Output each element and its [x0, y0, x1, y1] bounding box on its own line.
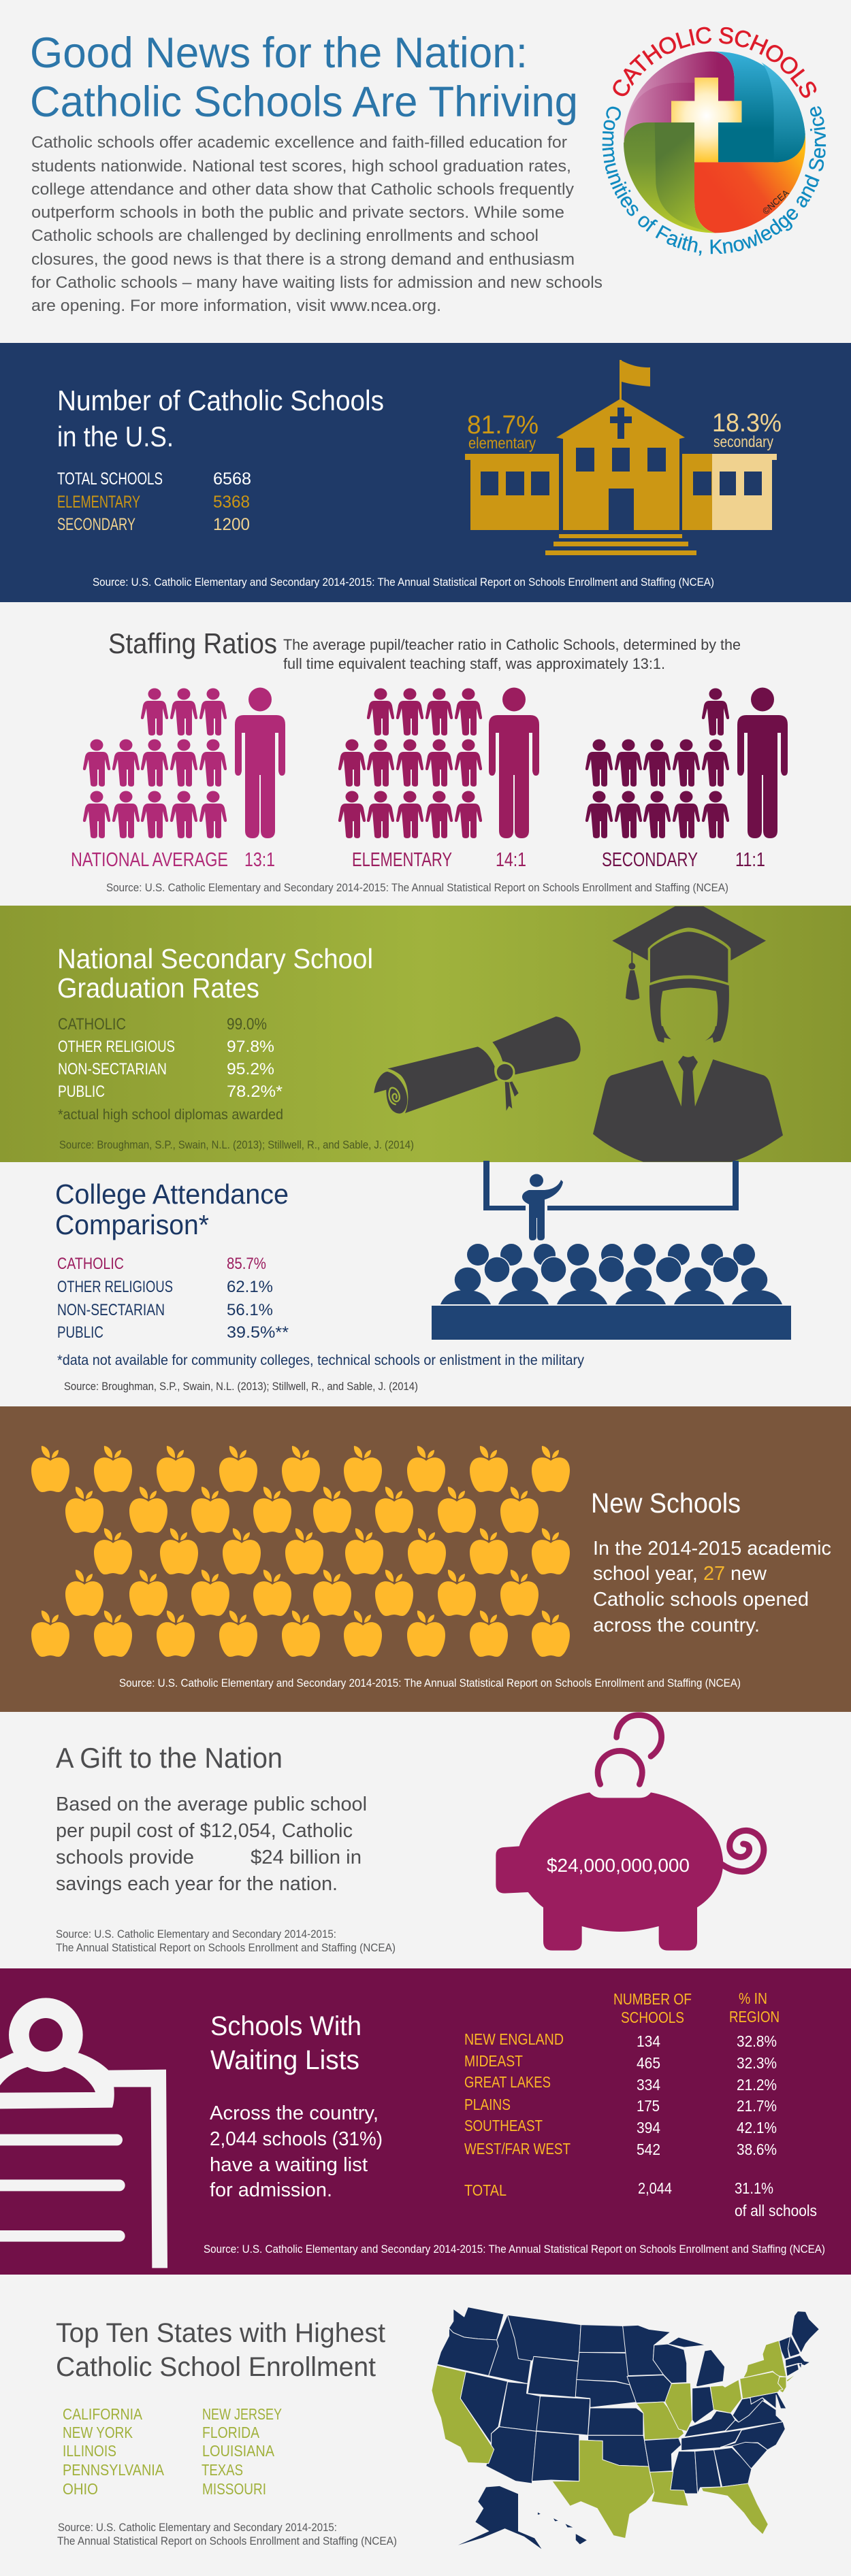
ratio labels: 13:1 — [244, 849, 275, 871]
college data: NON-SECTARIAN — [57, 1301, 165, 1319]
description: Catholic schools opened — [593, 1589, 809, 1611]
description: Based on the average public school — [56, 1794, 367, 1815]
graduation data: PUBLIC — [58, 1083, 105, 1101]
heading — [210, 2011, 362, 2075]
heading: Schools With — [210, 2011, 362, 2041]
description — [56, 1794, 367, 1895]
region percentages: 21.7% — [737, 2097, 777, 2115]
icon: school building — [465, 360, 777, 555]
description — [283, 636, 741, 672]
panel: staffing ratios — [71, 627, 788, 894]
pictogram: national average — [83, 687, 285, 838]
icon: Catholic Schools logo: ©NCEA — [760, 188, 791, 216]
college data: CATHOLIC — [57, 1255, 124, 1273]
intro text block: are opening. For more information, visit www.ncea.org. — [31, 297, 441, 315]
intro text block: closures, the good news is that there is a strong demand and enthusiasm — [31, 250, 575, 269]
region names: GREAT LAKES — [464, 2073, 551, 2091]
heading: A Gift to the Nation — [56, 1742, 283, 1774]
school numbers: 394 — [637, 2119, 660, 2136]
region names: PLAINS — [464, 2096, 511, 2113]
heading: College Attendance — [55, 1178, 289, 1210]
school counts — [57, 469, 251, 534]
description: per pupil cost of $12,054, Catholic — [56, 1820, 353, 1842]
region percentages: 38.6% — [737, 2141, 777, 2158]
state list: ILLINOIS — [63, 2442, 116, 2460]
heading: Catholic School Enrollment — [56, 2352, 376, 2382]
heading — [56, 2318, 385, 2382]
state list: CALIFORNIA — [63, 2405, 143, 2423]
graduation data: 78.2%* — [227, 1083, 283, 1101]
heading: Waiting Lists — [210, 2045, 359, 2075]
state list: OHIO — [63, 2480, 98, 2498]
table header — [613, 1989, 780, 2026]
description: across the country. — [593, 1615, 760, 1636]
region percentages: 32.8% — [737, 2032, 777, 2050]
front row — [454, 1267, 768, 1293]
intro text block: Catholic schools offer academic excellence and faith-filled education for — [31, 133, 567, 152]
school percentages: 81.7% — [467, 411, 539, 440]
middle row — [484, 1257, 739, 1283]
ratio labels: ELEMENTARY — [352, 849, 452, 871]
ratio labels: 14:1 — [496, 849, 526, 871]
table header: SCHOOLS — [621, 2009, 684, 2026]
icon: Catholic Schools logo: Communities of Faith, Knowledge and Service — [602, 106, 826, 256]
description: $24 billion in — [251, 1847, 362, 1868]
school numbers: 134 — [637, 2032, 660, 2050]
heading — [55, 1178, 289, 1240]
icon: Catholic Schools logo: CATHOLIC SCHOOLS — [613, 27, 817, 98]
state list: LOUISIANA — [202, 2442, 275, 2460]
title: Good News for the Nation: — [30, 29, 528, 77]
source note: Source: Broughman, S.P., Swain, N.L. (2013); Stillwell, R., and Sable, J. (2014) — [64, 1380, 418, 1393]
heading — [57, 384, 384, 452]
school counts: 5368 — [213, 493, 250, 512]
icon: graduate — [593, 906, 783, 1162]
source note — [56, 1928, 396, 1954]
school numbers: 334 — [637, 2076, 660, 2094]
region names: MIDEAST — [464, 2052, 523, 2070]
heading: Graduation Rates — [57, 972, 259, 1004]
table header: REGION — [729, 2008, 780, 2026]
state list: NEW JERSEY — [202, 2405, 282, 2423]
source note: Source: U.S. Catholic Elementary and Secondary 2014-2015: — [56, 1928, 336, 1941]
intro text block: college attendance and other data show that Catholic schools frequently — [31, 180, 574, 199]
icon: piggy bank — [496, 1715, 764, 1951]
region percentages: of all schools — [735, 2202, 817, 2219]
description: In the 2014-2015 academic — [593, 1538, 831, 1559]
footnote: *actual high school diplomas awarded — [58, 1107, 283, 1123]
graduation data: OTHER RELIGIOUS — [58, 1038, 175, 1056]
graduation data: CATHOLIC — [58, 1015, 126, 1034]
apples pictogram — [31, 1446, 570, 1657]
panel: a gift to the nation — [56, 1715, 764, 1954]
heading: Comparison* — [55, 1209, 209, 1240]
school percentages: elementary — [468, 434, 536, 452]
region percentages: 31.1% — [735, 2179, 773, 2197]
college data: 39.5%** — [227, 1323, 289, 1342]
heading: Staffing Ratios — [108, 627, 277, 659]
region percentages: 42.1% — [737, 2119, 777, 2136]
school percentages: secondary — [713, 433, 773, 450]
school numbers — [637, 2032, 672, 2197]
heading — [57, 943, 373, 1004]
state list — [63, 2405, 282, 2498]
region names: WEST/FAR WEST — [464, 2140, 571, 2158]
school percentages — [467, 409, 782, 452]
panel: number of Catholic schools — [0, 343, 851, 602]
description: Across the country, — [210, 2102, 379, 2124]
description: The average pupil/teacher ratio in Catholic Schools, determined by the — [283, 636, 741, 653]
description: schools provide — [56, 1847, 194, 1868]
source note: The Annual Statistical Report on Schools Enrollment and Staffing (NCEA) — [57, 2535, 397, 2547]
source note: Source: Broughman, S.P., Swain, N.L. (2013); Stillwell, R., and Sable, J. (2014) — [59, 1138, 414, 1151]
description: savings each year for the nation. — [56, 1873, 338, 1895]
title — [30, 29, 578, 126]
intro text block: outperform schools in both the public and private sectors. While some — [31, 203, 564, 222]
region names: SOUTHEAST — [464, 2117, 543, 2134]
school numbers: 2,044 — [638, 2179, 672, 2197]
state list: MISSOURI — [202, 2480, 266, 2498]
description: 2,044 schools (31%) — [210, 2128, 383, 2150]
intro text block — [31, 133, 603, 315]
ratio labels: 11:1 — [735, 849, 765, 871]
table header: NUMBER OF — [613, 1990, 692, 2008]
panel: top ten states — [56, 2307, 819, 2550]
source note: Source: U.S. Catholic Elementary and Secondary 2014-2015: The Annual Statistical Report on Schools Enrollment and Staffing (NCEA) — [106, 882, 728, 894]
description — [210, 2102, 383, 2201]
title: Catholic Schools Are Thriving — [30, 78, 578, 126]
region names: NEW ENGLAND — [464, 2030, 564, 2048]
ratio labels: NATIONAL AVERAGE — [71, 849, 228, 871]
state list: TEXAS — [202, 2461, 243, 2479]
panel: header introduction — [30, 27, 826, 315]
region names: TOTAL — [464, 2181, 507, 2199]
region percentages: 21.2% — [737, 2076, 777, 2094]
source note — [57, 2522, 397, 2547]
state list: PENNSYLVANIA — [63, 2461, 165, 2479]
table: waiting lists by region — [464, 1989, 817, 2219]
pictogram: secondary — [585, 687, 788, 838]
school numbers: 465 — [637, 2054, 660, 2072]
icon: diploma — [374, 1017, 581, 1114]
description: for admission. — [210, 2179, 332, 2201]
description — [593, 1538, 831, 1636]
panel: new schools — [0, 1406, 851, 1712]
back row — [467, 1244, 755, 1266]
source note: Source: U.S. Catholic Elementary and Secondary 2014-2015: The Annual Statistical Report on Schools Enrollment and Staffing (NCEA) — [119, 1677, 741, 1689]
pictogram: elementary — [338, 687, 539, 838]
region names — [464, 2030, 571, 2199]
college data — [57, 1255, 289, 1342]
panel: college attendance — [55, 1161, 791, 1393]
intro text block: for Catholic schools – many have waiting lists for admission and new schools — [31, 274, 603, 292]
ratio labels: SECONDARY — [602, 849, 698, 871]
source note: Source: U.S. Catholic Elementary and Secondary 2014-2015: — [58, 2522, 337, 2534]
intro text block: Catholic schools are challenged by declining enrollments and school — [31, 227, 539, 245]
table header: % IN — [739, 1989, 767, 2007]
college data: 56.1% — [227, 1301, 273, 1319]
college data: OTHER RELIGIOUS — [57, 1278, 173, 1296]
school counts: SECONDARY — [57, 515, 135, 534]
graduation data: NON-SECTARIAN — [58, 1060, 167, 1078]
heading: National Secondary School — [57, 943, 373, 974]
heading: Top Ten States with Highest — [56, 2318, 385, 2348]
heading: in the U.S. — [57, 420, 174, 452]
description: school year, 27 new — [593, 1563, 767, 1585]
school counts: 6568 — [213, 469, 251, 489]
icon: classroom — [432, 1161, 791, 1340]
panel: graduation rates — [0, 906, 851, 1162]
heading: New Schools — [591, 1487, 741, 1519]
heading: Number of Catholic Schools — [57, 384, 384, 416]
college data: 85.7% — [227, 1255, 266, 1273]
source note: Source: U.S. Catholic Elementary and Secondary 2014-2015: The Annual Statistical Report on Schools Enrollment and Staffing (NCEA) — [93, 576, 714, 589]
school percentages: 18.3% — [712, 409, 782, 437]
footnote: *data not available for community colleges, technical schools or enlistment in the military — [57, 1353, 584, 1368]
college data: 62.1% — [227, 1278, 273, 1296]
description: full time equivalent teaching staff, was approximately 13:1. — [283, 655, 665, 672]
icon: Catholic Schools logo — [602, 27, 826, 256]
intro text block: students nationwide. National test scores, high school graduation rates, — [31, 157, 571, 176]
source note: The Annual Statistical Report on Schools Enrollment and Staffing (NCEA) — [56, 1942, 396, 1954]
state list: FLORIDA — [202, 2424, 260, 2441]
amount: $24,000,000,000 — [547, 1855, 690, 1876]
graduation data: 95.2% — [227, 1060, 274, 1078]
college data: PUBLIC — [57, 1323, 103, 1342]
panel: schools with waiting lists — [0, 1968, 851, 2275]
ratio labels — [71, 849, 765, 871]
graduation data: 99.0% — [227, 1015, 267, 1034]
school numbers: 542 — [637, 2141, 660, 2158]
school counts: TOTAL SCHOOLS — [57, 469, 163, 489]
school counts: 1200 — [213, 515, 250, 534]
school counts: ELEMENTARY — [57, 493, 140, 512]
school numbers: 175 — [637, 2097, 660, 2115]
map: United States — [432, 2307, 819, 2550]
graduation data — [58, 1015, 283, 1101]
icon: clipboard — [0, 1998, 167, 2268]
region percentages — [735, 2032, 817, 2219]
description: have a waiting list — [210, 2154, 368, 2176]
graduation data: 97.8% — [227, 1038, 274, 1056]
state list: NEW YORK — [63, 2424, 133, 2441]
region percentages: 32.3% — [737, 2054, 777, 2072]
